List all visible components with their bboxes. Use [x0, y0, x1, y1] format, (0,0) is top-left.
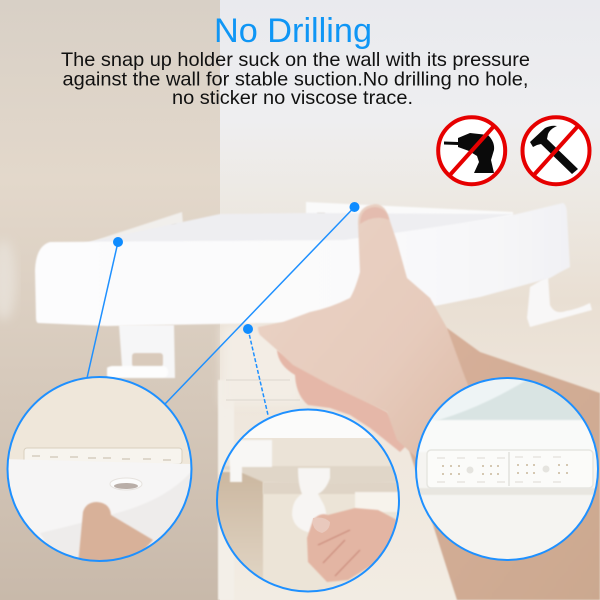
detail circle 1 outline [8, 377, 192, 561]
leader line: left detail [87, 242, 118, 378]
thumb nail [360, 207, 389, 224]
description text [61, 49, 530, 109]
hand gripping shelf [258, 204, 474, 470]
detail circle: shelf top with bracket and thumb [5, 375, 195, 565]
title: No Drilling [214, 12, 372, 50]
right wall bracket behind shelf [306, 202, 513, 232]
marker dot: right bracket [350, 202, 360, 212]
right shelf hook [527, 276, 592, 327]
description text: The snap up holder suck on the wall with its pressure [61, 49, 530, 71]
shelf top surface [84, 213, 515, 246]
marker dot: left bracket [113, 237, 123, 247]
detail circle: suction tab pulled by fingers [215, 405, 405, 597]
icon: no power drill [438, 117, 505, 184]
marker dot: under shelf [243, 324, 253, 334]
shelf front edge [35, 203, 570, 326]
fingers behind palm [277, 350, 412, 452]
leader line: dashed lower detail [248, 329, 268, 415]
detail circle 3 outline [416, 378, 598, 560]
description text: against the wall for stable suction.No drilling no hole, [62, 68, 528, 90]
leader line: centre detail [165, 207, 354, 404]
left shelf hook [107, 325, 175, 378]
icon: no hammer [522, 117, 590, 184]
detail circle 2 outline [217, 410, 399, 592]
forearm [400, 328, 600, 600]
description text: no sticker no viscose trace. [172, 87, 413, 109]
detail circle: underside suction panel [414, 376, 600, 562]
left wall bracket behind shelf [90, 212, 183, 247]
